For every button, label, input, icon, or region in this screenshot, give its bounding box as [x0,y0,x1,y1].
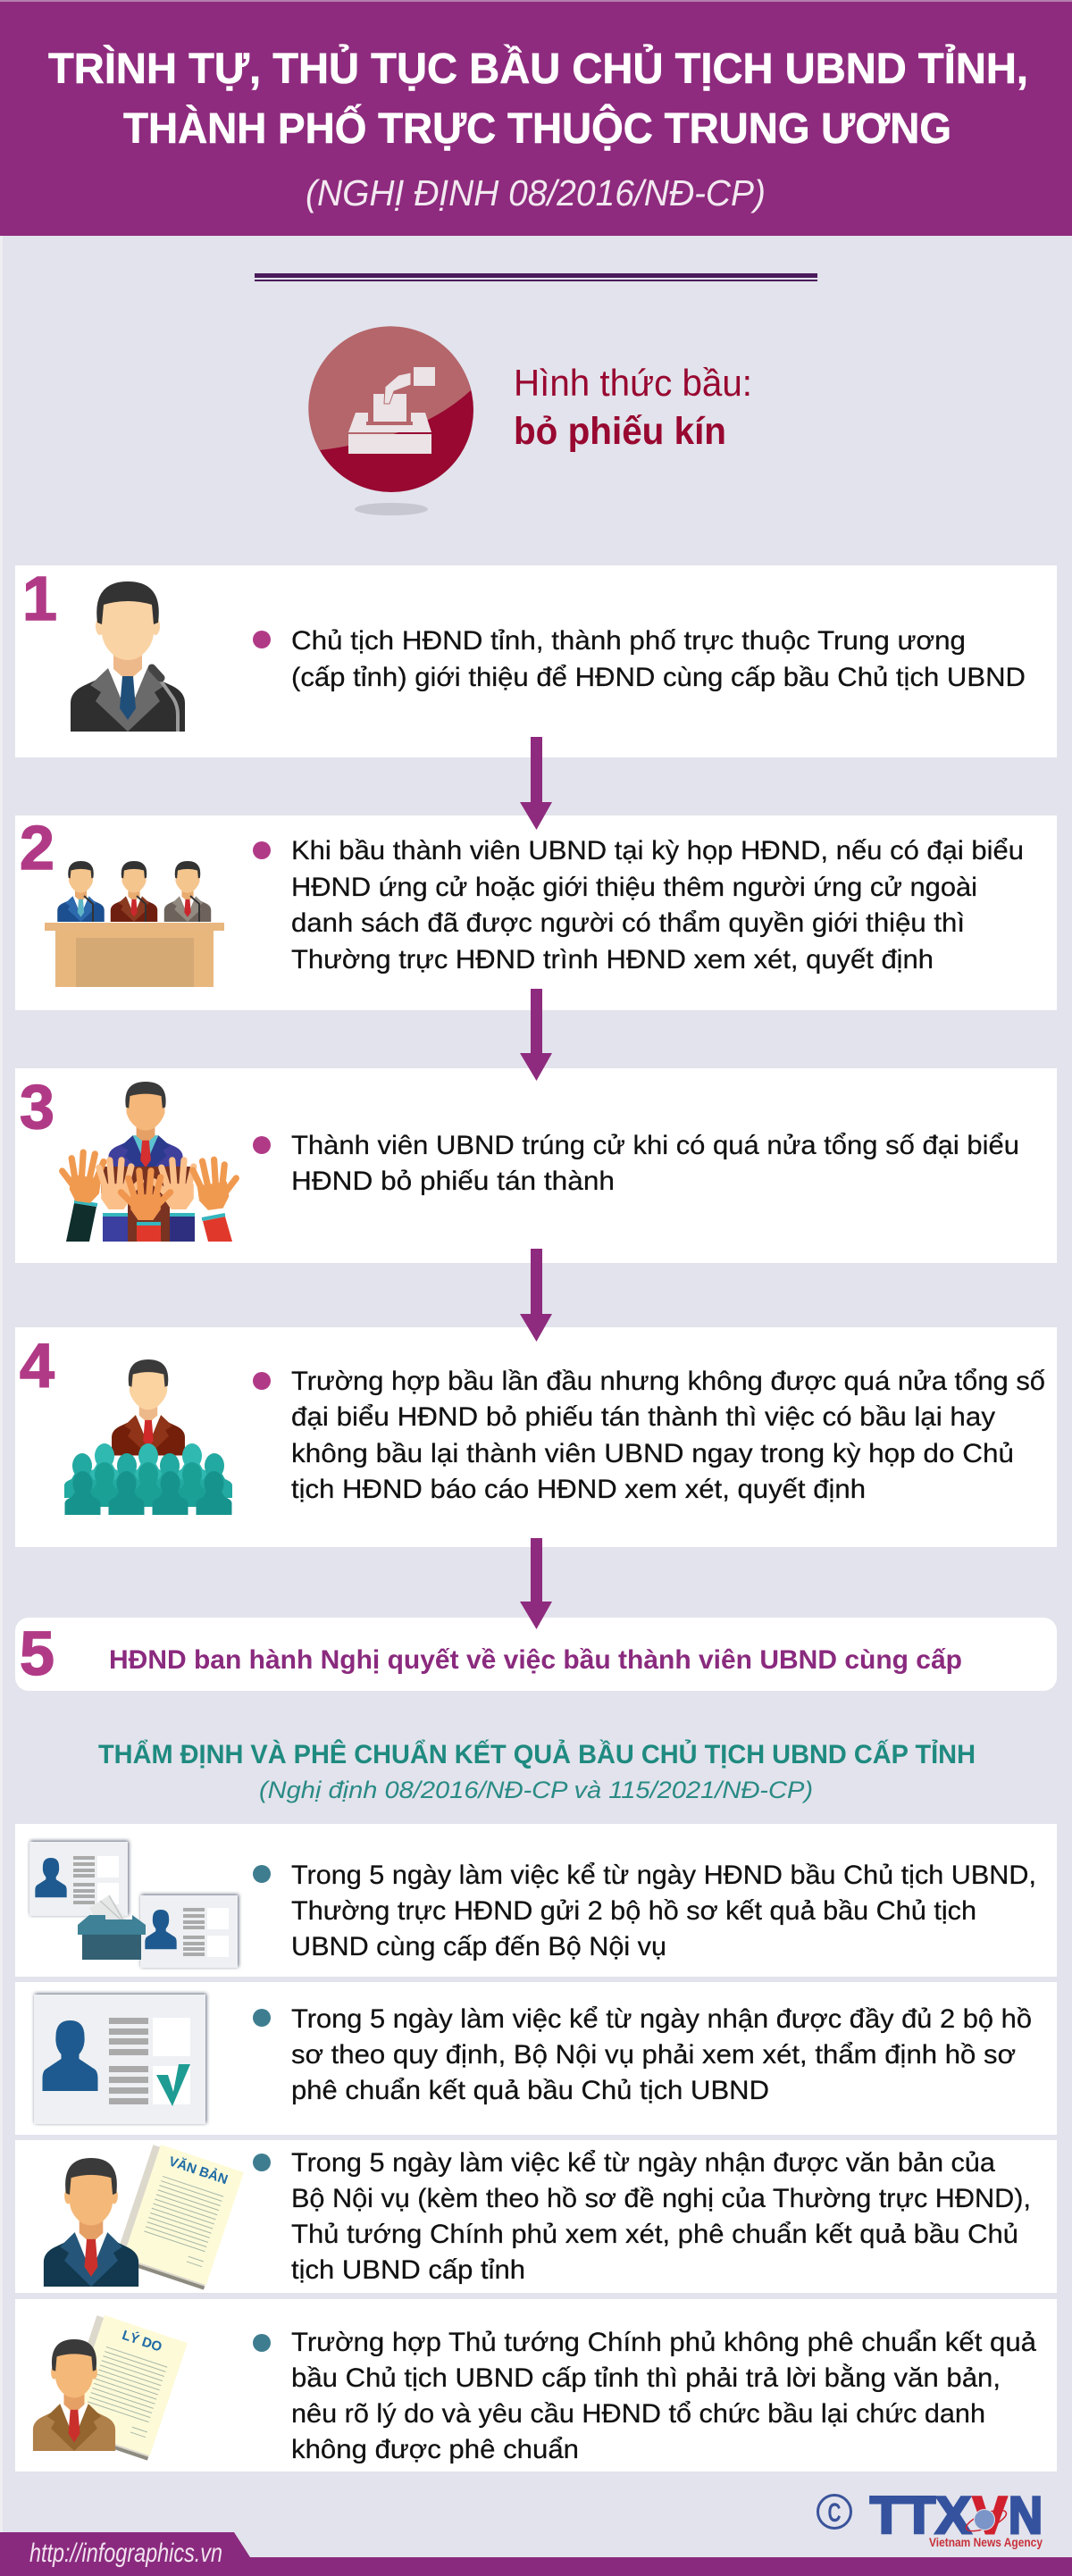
title: THÀNH PHỐ TRỰC THUỘC TRUNG ƯƠNG [123,104,951,153]
voting form text: bỏ phiếu kín [514,410,726,453]
arrow: step 4 to 5 [520,1538,552,1629]
text: verification step 3: tịch UBND cấp tỉnh [291,2255,525,2285]
footer url: http://infographics.vn [29,2538,222,2568]
panel: verification step 2 [15,1982,1057,2135]
document heading: LÝ DO [120,2327,164,2355]
panel: step 3 [15,1068,1057,1263]
icon: profile document with check mark [34,1995,205,2124]
arrow: step 2 to 3 [520,989,552,1081]
text: step 3 [291,1131,1019,1196]
subtitle: (NGHỊ ĐỊNH 08/2016/NĐ-CP) [306,172,766,213]
text: step 5: HĐND ban hành Nghị quyết về việc bầu thành viên UBND cùng cấp [109,1645,962,1675]
text: verification step 3: Bộ Nội vụ (kèm theo hồ sơ đề nghị của Thường trực HĐND), [291,2184,1031,2213]
text: step 4: đại biểu HĐND bỏ phiếu tán thành thì việc có bầu lại hay [291,1402,995,1432]
bullet [253,1372,271,1390]
title: TRÌNH TỰ, THỦ TỤC BẦU CHỦ TỊCH UBND TỈNH, [48,44,1028,93]
panel: step 5 [15,1618,1057,1691]
text: step 2 [291,836,1024,974]
panel: verification step 3 [15,2140,1057,2293]
text: verification step 3 [291,2148,1031,2285]
arrow: step 3 to 4 [520,1249,552,1342]
logo: TTXVN Vietnam News Agency: V [973,2487,1007,2545]
footer bar [0,2532,1072,2576]
text: verification step 4: không được phê chuẩn [291,2435,579,2464]
section heading: verification: THẨM ĐỊNH VÀ PHÊ CHUẨN KẾT QUẢ BẦU CHỦ TỊCH UBND CẤP TỈNH [98,1739,976,1769]
text: verification step 2: phê chuẩn kết quả bầu Chủ tịch UBND [291,2076,769,2105]
panel: step 4 [15,1327,1057,1547]
step number 3: 3 [20,1072,54,1142]
text: step 4: Trường hợp bầu lần đầu nhưng không được quá nửa tổng số [291,1367,1045,1396]
step number 4: 4 [20,1331,54,1401]
voting form text: Hình thức bầu: [514,362,752,404]
text: step 1: (cấp tỉnh) giới thiệu để HĐND cùng cấp bầu Chủ tịch UBND [291,663,1026,692]
text: verification step 4: nêu rõ lý do và yêu cầu HĐND tổ chức bầu lại chức danh [291,2399,985,2429]
text: verification step 1: UBND cùng cấp đến Bộ Nội vụ [291,1932,666,1961]
logo: TTXVN Vietnam News Agency: N [1009,2487,1043,2545]
icon: profile documents and ballot box [29,1842,238,1968]
panel: verification step 4 [15,2299,1057,2471]
icon: ballot box in circle [308,326,473,515]
text: step 2: danh sách đã được người có thẩm quyền giới thiệu thì [291,908,965,938]
document heading: VĂN BẢN [167,2154,230,2187]
bullet [253,2009,271,2027]
step number 1: 1 [22,564,57,633]
text: step 1 [291,626,1026,692]
step number 5: 5 [20,1618,54,1688]
panel: step 1 [15,564,1057,757]
bullet [253,1865,271,1883]
logo: TTXVN Vietnam News Agency: TTX [870,2487,971,2545]
text: verification step 2: sơ theo quy định, Bộ Nội vụ phải xem xét, thẩm định hồ sơ [291,2040,1016,2070]
header banner [0,0,1072,236]
icon: man with reason document [33,2313,188,2461]
bullet [253,1136,271,1154]
icon: man with document [44,2142,244,2290]
text: verification step 2: Trong 5 ngày làm việc kể từ ngày nhận được đầy đủ 2 bộ hồ [291,2004,1032,2034]
text: step 2: Thường trực HĐND trình HĐND xem xét, quyết định [291,945,934,974]
text: verification step 3: Trong 5 ngày làm việc kể từ ngày nhận được văn bản của [291,2148,995,2178]
icon: speaker with microphone [71,581,185,732]
text: verification step 1: Thường trực HĐND gửi 2 bộ hồ sơ kết quả bầu Chủ tịch [291,1896,976,1926]
panel: verification step 1 [15,1824,1057,1977]
text: step 4: không bầu lại thành viên UBND ngay trong kỳ họp do Chủ [291,1439,1014,1468]
title [48,44,1028,153]
text: verification step 4 [291,2328,1036,2464]
text: step 2: Khi bầu thành viên UBND tại kỳ họp HĐND, nếu có đại biểu [291,836,1024,866]
icon: presenter and teal crowd [64,1359,232,1515]
bullet [253,841,271,859]
text: step 4: tịch HĐND báo cáo HĐND xem xét, quyết định [291,1475,866,1504]
icon: raised hands voting [58,1082,240,1242]
logo: TTXVN Vietnam News Agency [818,2487,1043,2549]
text: verification step 4: bầu Chủ tịch UBND cấp tỉnh thì phải trả lời bằng văn bản, [291,2363,1001,2393]
bullet [253,631,271,648]
panel: step 2 [15,813,1057,1010]
logo: TTXVN Vietnam News Agency: C [827,2498,842,2528]
text: step 2: HĐND ứng cử hoặc giới thiệu thêm người ứng cử ngoài [291,873,977,902]
text: step 3: Thành viên UBND trúng cử khi có quá nửa tổng số đại biểu [291,1131,1019,1160]
section subheading: (Nghị định 08/2016/NĐ-CP và 115/2021/NĐ-CP) [259,1777,813,1803]
arrow: step 1 to 2 [520,737,552,830]
voting form text [514,362,752,453]
bullet [253,2154,271,2171]
text: step 1: Chủ tịch HĐND tỉnh, thành phố trực thuộc Trung ương [291,626,966,656]
bullet [253,2334,271,2352]
text: verification step 1 [291,1861,1036,1961]
text: step 3: HĐND bỏ phiếu tán thành [291,1167,615,1196]
text: verification step 1: Trong 5 ngày làm việc kể từ ngày HĐND bầu Chủ tịch UBND, [291,1861,1036,1890]
step number 2: 2 [20,813,54,882]
text: verification step 3: Thủ tướng Chính phủ xem xét, phê chuẩn kết quả bầu Chủ [291,2220,1018,2249]
text: verification step 4: Trường hợp Thủ tướng Chính phủ không phê chuẩn kết quả [291,2328,1036,2357]
icon: three delegates at desk [45,861,224,987]
text: verification step 2 [291,2004,1032,2105]
text: step 4 [291,1367,1045,1504]
logo: TTXVN Vietnam News Agency: Vietnam News Agency [929,2535,1043,2549]
